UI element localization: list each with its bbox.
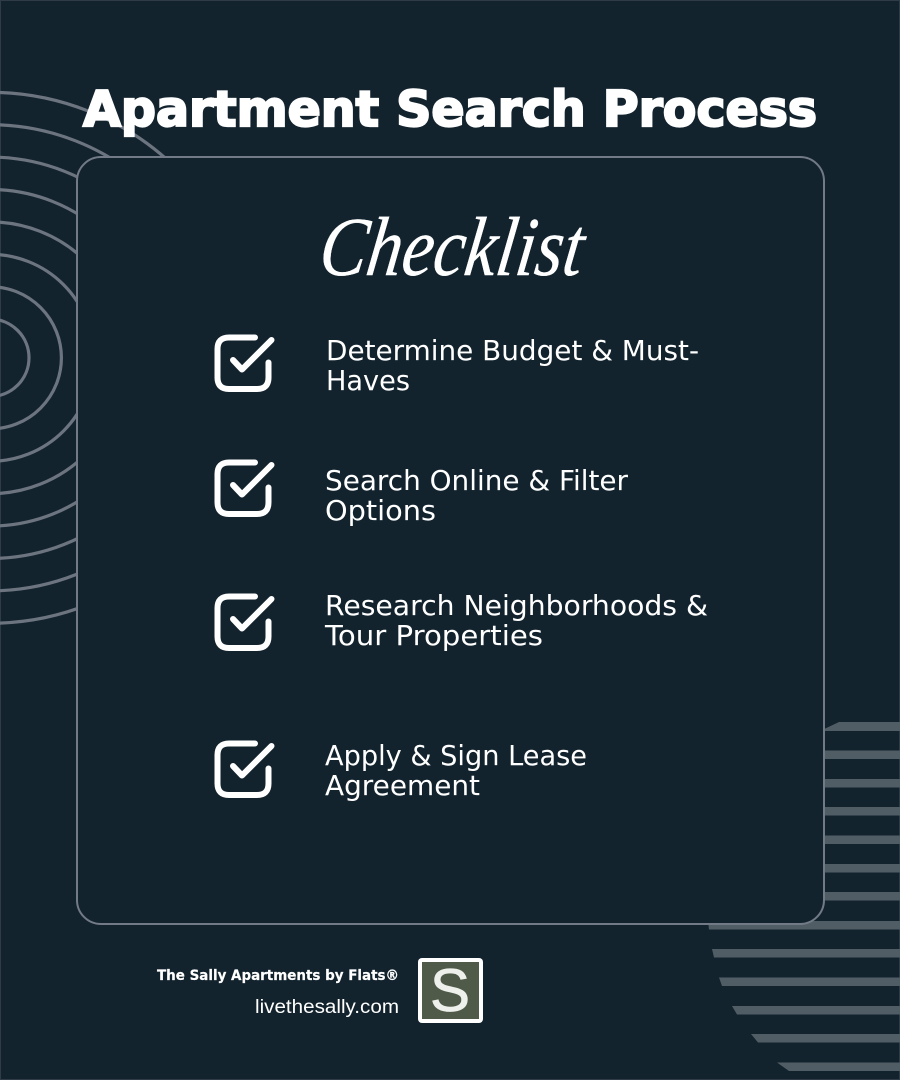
footer brand name: The Sally Apartments by Flats® xyxy=(157,968,399,984)
icon: logo: S xyxy=(430,957,470,1024)
label: item 3: Research Neighborhoods & xyxy=(325,589,708,622)
icon: logo xyxy=(418,957,483,1024)
checklist item 4 xyxy=(218,739,587,802)
checklist item 3 xyxy=(218,589,708,652)
label: item 1: Haves xyxy=(326,364,410,397)
icon: checkbox 4 xyxy=(218,744,272,795)
label: item 1: Determine Budget & Must- xyxy=(326,334,699,367)
label: item 3: Tour Properties xyxy=(324,619,543,652)
decorative stripes xyxy=(708,722,900,1071)
label: item 2: Search Online & Filter xyxy=(325,464,628,497)
heading: Checklist: Checklist xyxy=(314,201,592,294)
footer website: livethesally.com xyxy=(255,997,399,1018)
decorative concentric rings xyxy=(0,92,256,623)
icon: checkbox 2 xyxy=(218,462,272,514)
icon: checkbox 3 xyxy=(218,596,272,648)
icon: checkbox 1 xyxy=(218,338,272,389)
label: item 4: Apply & Sign Lease xyxy=(325,739,587,772)
panel: checklist xyxy=(77,157,824,924)
checklist item 1 xyxy=(218,334,699,397)
title: Apartment Search Process xyxy=(83,81,817,138)
checklist item 2 xyxy=(218,462,628,527)
label: item 2: Options xyxy=(325,494,436,527)
panel background xyxy=(77,157,824,924)
label: item 4: Agreement xyxy=(325,769,480,802)
